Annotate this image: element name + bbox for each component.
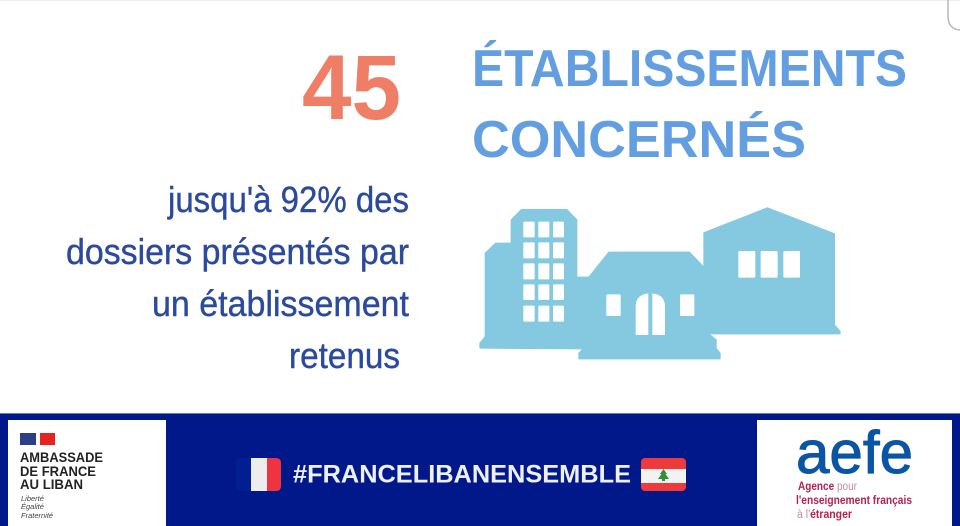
heading: établissements concernés xyxy=(472,40,907,169)
heading: établissements concernés: ÉTABLISSEMENTS xyxy=(472,40,907,98)
motto: Égalité xyxy=(21,502,44,511)
motto: Fraternité xyxy=(21,511,53,520)
icon: school buildings xyxy=(480,208,840,358)
agency name xyxy=(796,481,912,521)
big number 45: 45 xyxy=(302,37,401,139)
embassy name xyxy=(20,449,103,492)
agency name: à l'étranger xyxy=(797,509,852,521)
text block: share of applications: dossiers présentés par xyxy=(66,231,409,272)
text block: share of applications: jusqu'à 92% des xyxy=(167,179,409,220)
hashtag: #FRANCELIBANENSEMBLE xyxy=(293,460,631,488)
embassy name: AMBASSADE xyxy=(20,449,103,465)
icon: French flag xyxy=(236,458,281,491)
agency name: l'enseignement français xyxy=(796,495,912,507)
aefe wordmark: aefe xyxy=(796,419,913,486)
motto xyxy=(21,494,53,520)
icon: Marianne mark xyxy=(20,433,55,445)
logo: Ambassade de France au Liban xyxy=(8,420,166,526)
footer banner xyxy=(0,413,960,526)
text block: share of applications xyxy=(66,179,409,376)
embassy name: DE FRANCE xyxy=(20,463,96,479)
agency name: Agence pour xyxy=(798,481,857,493)
text block: share of applications: retenus xyxy=(289,335,400,376)
text block: share of applications: un établissement xyxy=(152,283,409,324)
logo: AEFE xyxy=(757,419,952,526)
heading: établissements concernés: CONCERNÉS xyxy=(472,111,806,169)
motto: Liberté xyxy=(21,494,44,503)
icon: Lebanese flag xyxy=(641,458,686,491)
embassy name: AU LIBAN xyxy=(20,476,83,492)
